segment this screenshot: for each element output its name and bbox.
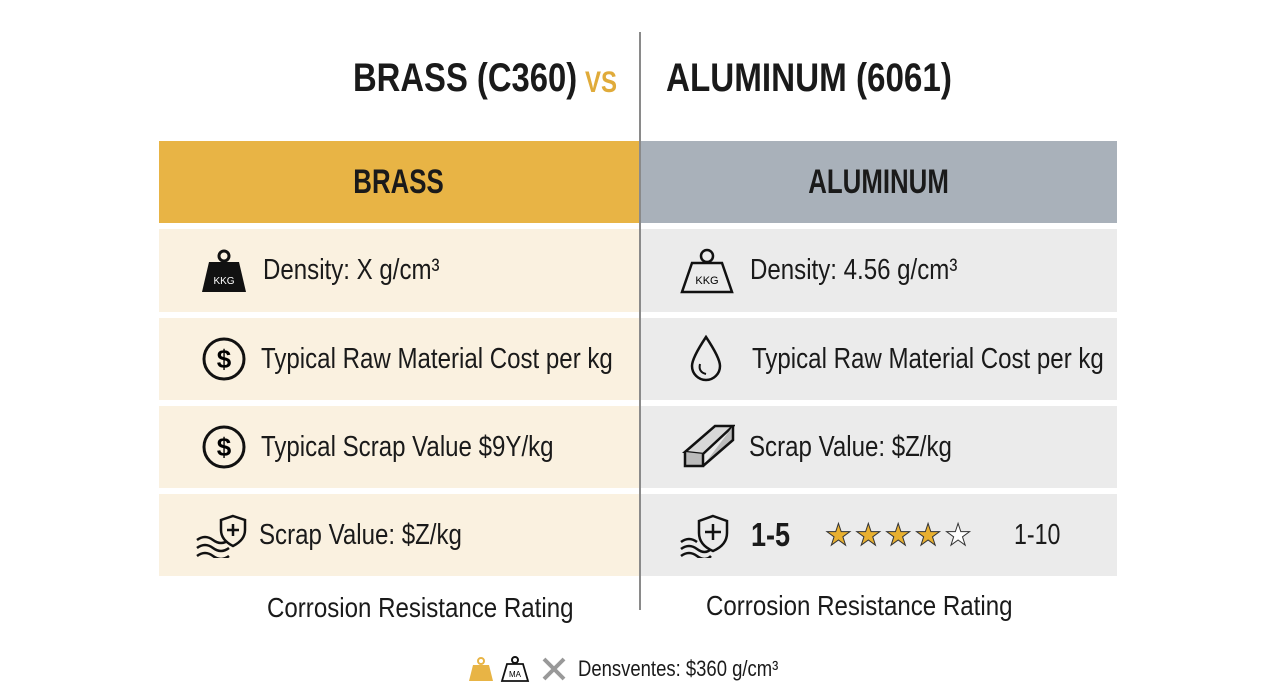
brass row 1: density: Density: X g/cm³ [263, 254, 440, 286]
aluminum row 2: raw cost [641, 318, 1117, 400]
title: BRASS (C360) [353, 56, 577, 100]
aluminum row 1: density [641, 229, 1117, 312]
aluminum row 2: raw cost: Typical Raw Material Cost per kg [752, 342, 1104, 374]
aluminum row 4: rating: 1-5 [751, 516, 790, 553]
footer legend: Densventes: $360 g/cm³ [578, 656, 778, 681]
brass row 2: raw cost: Typical Raw Material Cost per kg [261, 342, 613, 374]
caption: brass: Corrosion Resistance Rating [267, 592, 573, 623]
brass row 3: scrap value: Typical Scrap Value $9Y/kg [261, 430, 554, 462]
caption: aluminum: Corrosion Resistance Rating [706, 590, 1012, 621]
aluminum row 3: scrap: Scrap Value: $Z/kg [749, 430, 952, 462]
title: ALUMINUM (6061) [666, 56, 952, 100]
title: VS [585, 66, 617, 99]
brass row 3: scrap value: $ [217, 432, 232, 462]
aluminum row 1: density: KKG [695, 274, 719, 286]
brass row 1: density: KKG [213, 276, 235, 286]
title [353, 56, 952, 100]
aluminum row 4: rating: ★★★★★ [825, 518, 974, 552]
header: brass: BRASS [354, 162, 444, 200]
brass row 2: raw cost: $ [217, 344, 232, 374]
divider line [639, 32, 641, 610]
brass row 2: raw cost [159, 318, 639, 400]
footer legend: MA [509, 670, 522, 679]
brass row 1: density [159, 229, 639, 312]
brass row 4: scrap value z [159, 494, 639, 576]
brass row 3: scrap value [159, 406, 639, 488]
aluminum row 4: rating: 1-10 [1014, 518, 1061, 550]
footer legend [469, 656, 778, 682]
aluminum row 4: rating [641, 494, 1117, 576]
header: aluminum [641, 141, 1117, 223]
header: brass [159, 141, 639, 223]
aluminum row 3: scrap [641, 406, 1117, 488]
header: aluminum: ALUMINUM [809, 162, 949, 200]
aluminum row 1: density: Density: 4.56 g/cm³ [750, 254, 957, 286]
brass row 4: scrap value z: Scrap Value: $Z/kg [259, 518, 462, 550]
